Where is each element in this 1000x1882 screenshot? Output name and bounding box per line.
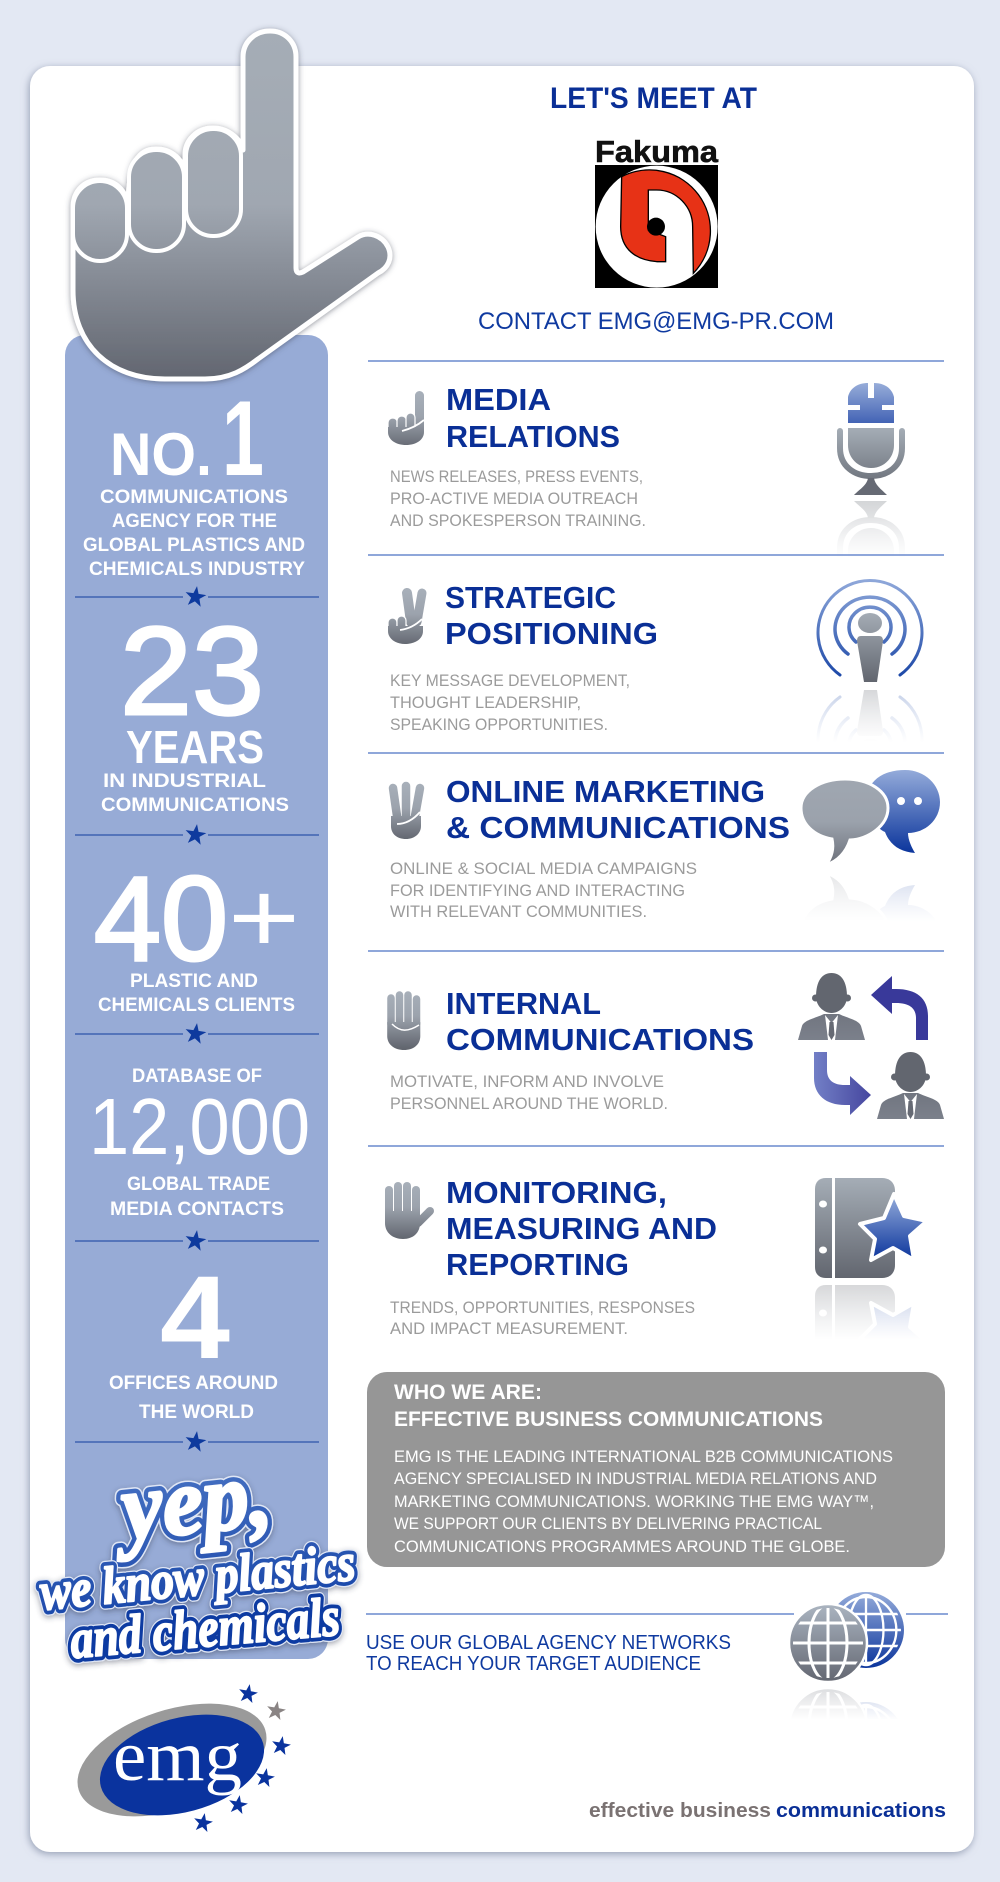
slogan lettering: and chemicals bbox=[68, 1586, 342, 1670]
divider with star bbox=[75, 585, 319, 607]
stat: 40+ clients: + bbox=[228, 862, 300, 974]
panel: who we are: AGENCY SPECIALISED IN INDUSTRIAL MEDIA RELATIONS AND bbox=[394, 1469, 877, 1488]
stat: 23 years bbox=[101, 602, 289, 816]
stat: 12,000 contacts: DATABASE OF bbox=[132, 1066, 262, 1087]
tagline: communications bbox=[776, 1800, 946, 1822]
section: internal communications: PERSONNEL AROUND THE WORLD. bbox=[390, 1094, 668, 1113]
stat: 12,000 contacts: 12,000 bbox=[89, 1082, 310, 1171]
stat: 23 years: IN INDUSTRIAL bbox=[103, 771, 266, 792]
section: strategic positioning: POSITIONING bbox=[445, 616, 658, 651]
section: online marketing: ONLINE & SOCIAL MEDIA CAMPAIGNS bbox=[390, 859, 697, 878]
panel: who we are: EFFECTIVE BUSINESS COMMUNICATIONS bbox=[394, 1408, 823, 1431]
heading: let's meet at: LET'S MEET AT bbox=[550, 82, 757, 115]
icon reflections bbox=[780, 500, 950, 1781]
slogan lettering bbox=[38, 1439, 358, 1670]
tagline: effective business bbox=[589, 1800, 771, 1822]
section: monitoring: REPORTING bbox=[446, 1247, 629, 1282]
section: internal communications: MOTIVATE, INFORM AND INVOLVE bbox=[390, 1072, 664, 1091]
stat: 23 years: COMMUNICATIONS bbox=[101, 795, 289, 816]
Fakuma logo: Fakuma bbox=[595, 134, 719, 169]
stat: No. 1 agency: COMMUNICATIONS bbox=[100, 487, 288, 508]
icon: four-finger hand bbox=[387, 995, 420, 1050]
section: strategic positioning: KEY MESSAGE DEVELOPMENT, bbox=[390, 671, 630, 690]
section: internal communications: COMMUNICATIONS bbox=[446, 1022, 754, 1057]
panel: who we are bbox=[367, 1372, 945, 1567]
EMG logo bbox=[63, 1682, 292, 1838]
stat: 4 offices: OFFICES AROUND bbox=[109, 1373, 278, 1394]
global networks callout bbox=[366, 1614, 948, 1675]
icon: speech bubbles bbox=[801, 770, 940, 865]
stat: 40+ clients: CHEMICALS CLIENTS bbox=[98, 995, 295, 1016]
section: online marketing bbox=[390, 770, 940, 921]
section: media relations: PRO-ACTIVE MEDIA OUTREACH bbox=[390, 489, 638, 508]
section: online marketing: FOR IDENTIFYING AND INTERACTING bbox=[390, 881, 685, 900]
stat: 12,000 contacts bbox=[89, 1066, 310, 1220]
stat: 23 years: 23 bbox=[120, 602, 264, 741]
Fakuma logo bbox=[595, 134, 719, 288]
stat: No. 1 agency: GLOBAL PLASTICS AND bbox=[83, 535, 305, 556]
section: monitoring: MEASURING AND bbox=[446, 1211, 717, 1246]
section: online marketing: & COMMUNICATIONS bbox=[446, 810, 790, 845]
stat: 12,000 contacts: GLOBAL TRADE bbox=[127, 1174, 270, 1195]
section: online marketing: ONLINE MARKETING bbox=[446, 774, 765, 809]
contact line: CONTACT EMG@EMG-PR.COM bbox=[478, 308, 834, 335]
stat: 4 offices bbox=[109, 1252, 278, 1423]
slogan lettering: we know plastics bbox=[38, 1534, 358, 1622]
icon: microphone bbox=[840, 383, 902, 495]
stat: No. 1 agency bbox=[83, 378, 305, 580]
slogan lettering: we know plastics bbox=[38, 1534, 358, 1622]
stat: 40+ clients: PLASTIC AND bbox=[130, 971, 258, 992]
slogan lettering: we know plastics bbox=[38, 1534, 358, 1622]
icon: broadcast person bbox=[818, 581, 922, 682]
section: media relations bbox=[388, 382, 902, 530]
global networks callout: USE OUR GLOBAL AGENCY NETWORKS bbox=[366, 1631, 731, 1654]
stat: 23 years: YEARS bbox=[126, 721, 264, 773]
stat: No. 1 agency: 1 bbox=[222, 378, 264, 498]
section: monitoring: AND IMPACT MEASUREMENT. bbox=[390, 1319, 628, 1338]
icon: two-finger hand bbox=[388, 593, 423, 644]
icon: one-finger hand bbox=[388, 391, 424, 445]
tagline bbox=[589, 1800, 946, 1822]
section: media relations: MEDIA bbox=[446, 382, 551, 417]
divider with star bbox=[75, 823, 319, 845]
slogan lettering: yep, bbox=[107, 1439, 276, 1562]
icon: notebook and star bbox=[815, 1178, 927, 1278]
stat: 40+ clients: 40 bbox=[94, 852, 228, 986]
icon: globes bbox=[789, 1592, 904, 1682]
slogan lettering: and chemicals bbox=[68, 1586, 342, 1670]
icon: open hand bbox=[385, 1186, 430, 1239]
slogan lettering: and chemicals bbox=[68, 1586, 342, 1670]
section: strategic positioning: STRATEGIC bbox=[445, 580, 616, 615]
panel: who we are: EMG IS THE LEADING INTERNATIONAL B2B COMMUNICATIONS bbox=[394, 1447, 893, 1466]
section divider lines bbox=[368, 361, 944, 1146]
global networks callout: TO REACH YOUR TARGET AUDIENCE bbox=[366, 1652, 701, 1675]
stat: No. 1 agency: CHEMICALS INDUSTRY bbox=[89, 559, 305, 580]
slogan lettering: yep, bbox=[107, 1439, 276, 1562]
icon: three-finger hand bbox=[391, 786, 421, 839]
section: monitoring bbox=[385, 1175, 927, 1338]
stat: 12,000 contacts: MEDIA CONTACTS bbox=[110, 1199, 284, 1220]
section: strategic positioning: SPEAKING OPPORTUNITIES. bbox=[390, 715, 608, 734]
section: strategic positioning bbox=[388, 580, 922, 734]
section: monitoring: MONITORING, bbox=[446, 1175, 667, 1210]
divider with star bbox=[75, 1430, 319, 1452]
section: strategic positioning: THOUGHT LEADERSHIP, bbox=[390, 693, 581, 712]
icon: people and arrows bbox=[798, 973, 944, 1119]
stat: No. 1 agency: AGENCY FOR THE bbox=[112, 511, 277, 532]
left stats panel background bbox=[65, 335, 328, 1659]
section: media relations: NEWS RELEASES, PRESS EVENTS, bbox=[390, 467, 643, 486]
section: monitoring: TRENDS, OPPORTUNITIES, RESPONSES bbox=[390, 1298, 695, 1317]
divider with star bbox=[75, 1022, 319, 1044]
section: online marketing: WITH RELEVANT COMMUNITIES. bbox=[390, 902, 647, 921]
panel: who we are: WE SUPPORT OUR CLIENTS BY DELIVERING PRACTICAL bbox=[394, 1514, 822, 1533]
divider with star bbox=[75, 1229, 319, 1251]
panel: who we are: WHO WE ARE: bbox=[394, 1381, 542, 1404]
section: media relations: AND SPOKESPERSON TRAINING. bbox=[390, 511, 646, 530]
EMG logo: emg bbox=[113, 1716, 242, 1796]
section: media relations: RELATIONS bbox=[446, 419, 620, 454]
stat: No. 1 agency: NO. bbox=[110, 421, 212, 488]
slogan lettering: yep, bbox=[107, 1439, 276, 1562]
section: internal communications bbox=[387, 973, 944, 1119]
panel: who we are: MARKETING COMMUNICATIONS. WORKING THE EMG WAY™, bbox=[394, 1492, 874, 1511]
stat: 4 offices: 4 bbox=[160, 1252, 230, 1384]
stat: 40+ clients bbox=[94, 852, 300, 1016]
panel: who we are: COMMUNICATIONS PROGRAMMES AROUND THE GLOBE. bbox=[394, 1537, 850, 1556]
stat: 4 offices: THE WORLD bbox=[139, 1402, 254, 1423]
section: internal communications: INTERNAL bbox=[446, 986, 601, 1021]
pointing hand illustration bbox=[73, 31, 390, 379]
